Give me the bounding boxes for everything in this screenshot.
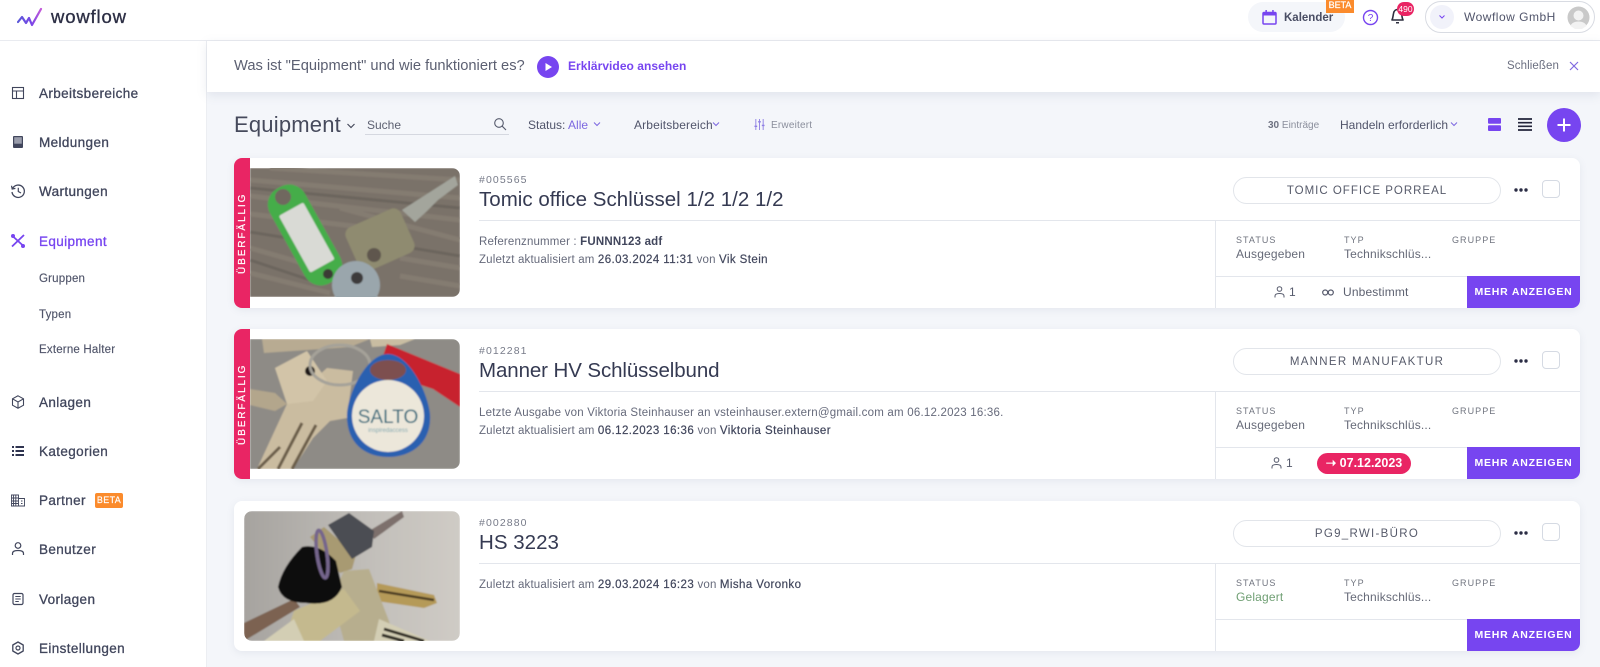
video link: Erklärvideo ansehen <box>568 59 686 73</box>
equipment id: #005565 <box>479 174 528 186</box>
page title: Equipment <box>234 112 341 137</box>
toolbar <box>234 108 1581 142</box>
photo: keys with SALTO fob: inspiredaccess <box>368 428 408 434</box>
reference number: Referenznummer : FUNNN123 adf <box>479 236 662 248</box>
equipment title: Tomic office Schlüssel 1/2 1/2 1/2 <box>479 188 784 211</box>
location pill: PG9_RWI-BÜRO <box>1315 528 1419 540</box>
nav item: Anlagen: Anlagen <box>39 395 91 410</box>
nav item: Partner with beta badge: BETA <box>97 495 121 505</box>
status value: Ausgegeben <box>1236 247 1305 261</box>
chevron button <box>1430 5 1454 29</box>
nav item: Anlagen <box>12 395 91 410</box>
equipment card: Tomic office <box>234 158 1580 308</box>
photo: keys with SALTO fob: SALTO <box>358 407 418 428</box>
group label: GRUPPE <box>1452 406 1496 416</box>
icon: search <box>494 118 506 130</box>
overdue date pill <box>1317 453 1411 474</box>
workspace filter: Arbeitsbereich <box>634 118 713 132</box>
nav item: Partner with beta badge: Partner <box>39 493 86 508</box>
sort dropdown: Handeln erforderlich <box>1340 118 1448 132</box>
type label: TYP <box>1344 578 1365 588</box>
sub nav: Externe Halter: Externe Halter <box>39 344 115 356</box>
sidebar navigation <box>0 41 207 667</box>
explainer banner <box>207 41 1600 92</box>
search field <box>365 114 509 135</box>
icon: more menu <box>1514 359 1528 363</box>
search placeholder: Suche <box>367 118 401 132</box>
select checkbox <box>1542 351 1560 369</box>
equipment id: #012281 <box>479 345 528 357</box>
nav item: Kategorien <box>12 444 108 460</box>
status value: Gelagert <box>1236 590 1283 604</box>
beta badge: BETA <box>1329 0 1351 10</box>
icon: notification bell <box>1391 8 1404 24</box>
status value: Ausgegeben <box>1236 418 1305 432</box>
last issue note: Letzte Ausgabe von Viktoria Steinhauser an vsteinhauser.extern@gmail.com am 06.12.2023 16:36. <box>479 407 1004 419</box>
icon: advanced filter sliders <box>754 119 765 130</box>
calendar label: Kalender <box>1284 12 1333 24</box>
sub nav: Typen: Typen <box>39 309 71 321</box>
more button <box>1467 276 1580 308</box>
equipment card: HS 3223 <box>234 501 1580 651</box>
equipment card: Manner HV <box>234 329 1580 479</box>
icon: help: ? <box>1368 13 1374 24</box>
location pill <box>1233 348 1501 375</box>
company name: Wowflow GmbH <box>1464 10 1556 24</box>
calendar button <box>1248 2 1345 32</box>
last updated: Zuletzt aktualisiert am 06.12.2023 16:36 von Viktoria Steinhauser <box>479 425 831 437</box>
type label: TYP <box>1344 235 1365 245</box>
status filter: Status: Alle <box>528 118 588 132</box>
group label: GRUPPE <box>1452 578 1496 588</box>
icon: calendar <box>1262 10 1277 25</box>
nav item: Wartungen: Wartungen <box>39 184 108 199</box>
due date value: Unbestimmt <box>1343 285 1409 299</box>
nav item: Vorlagen: Vorlagen <box>39 592 95 607</box>
type label: TYP <box>1344 406 1365 416</box>
equipment title: HS 3223 <box>479 531 559 554</box>
type value: Technikschlüs... <box>1344 247 1431 261</box>
nav item: Kategorien: Kategorien <box>39 444 108 459</box>
nav item: Einstellungen: Einstellungen <box>39 641 125 656</box>
more button <box>1467 619 1580 651</box>
equipment title: Manner HV Schlüsselbund <box>479 359 719 382</box>
icon: more menu <box>1514 531 1528 535</box>
type value: Technikschlüs... <box>1344 418 1431 432</box>
advanced filter label: Erweitert <box>771 120 812 131</box>
icon: card view <box>1488 118 1501 131</box>
last updated: Zuletzt aktualisiert am 26.03.2024 11:31 von Vik Stein <box>479 254 768 266</box>
nav item: Partner with beta badge <box>11 493 123 508</box>
sub nav: Gruppen: Gruppen <box>39 273 85 285</box>
last updated: Zuletzt aktualisiert am 29.03.2024 16:23 von Misha Voronko <box>479 579 801 591</box>
nav item: Benutzer: Benutzer <box>39 542 96 557</box>
holder count: 1 <box>1289 285 1296 299</box>
location pill <box>1233 520 1501 547</box>
nav item: Arbeitsbereiche: Arbeitsbereiche <box>39 86 139 101</box>
company selector <box>1425 1 1595 33</box>
more button: MEHR ANZEIGEN <box>1474 629 1573 641</box>
more button: MEHR ANZEIGEN <box>1474 286 1573 298</box>
more button: MEHR ANZEIGEN <box>1474 457 1573 469</box>
notification badge <box>1397 2 1414 16</box>
holder count: 1 <box>1286 456 1293 470</box>
holder count <box>1272 456 1293 470</box>
nav item: Benutzer <box>12 542 96 557</box>
status label: STATUS <box>1236 235 1276 245</box>
more button <box>1467 447 1580 479</box>
icon: wowflow logo <box>17 8 42 26</box>
select checkbox <box>1542 180 1560 198</box>
group label: GRUPPE <box>1452 235 1496 245</box>
icon: help <box>1362 10 1378 26</box>
nav item: Vorlagen <box>12 592 95 608</box>
overdue date pill: ➝ 07.12.2023 <box>1326 456 1402 470</box>
status label: STATUS <box>1236 578 1276 588</box>
overdue ribbon: ÜBERFÄLLIG <box>237 193 248 274</box>
beta badge <box>1326 0 1354 13</box>
status label: STATUS <box>1236 406 1276 416</box>
close label: Schließen <box>1507 60 1559 72</box>
overdue ribbon <box>234 158 250 308</box>
nav item: Wartungen <box>11 184 108 200</box>
add button <box>1547 108 1581 142</box>
location pill <box>1233 177 1501 204</box>
nav item: Meldungen: Meldungen <box>39 135 109 150</box>
top header bar <box>0 0 1600 41</box>
sort chevron <box>1450 122 1458 126</box>
notification badge: 490 <box>1398 4 1413 14</box>
type value: Technikschlüs... <box>1344 590 1431 604</box>
icon: infinity <box>1322 289 1334 296</box>
banner question: Was ist "Equipment" und wie funktioniert es? <box>234 58 525 74</box>
title chevron <box>347 124 355 128</box>
overdue ribbon: ÜBERFÄLLIG <box>237 364 248 445</box>
location pill: TOMIC OFFICE PORREAL <box>1287 185 1447 197</box>
photo: keys with SALTO fob <box>250 339 460 469</box>
nav item: Equipment (active) <box>11 234 107 250</box>
status chevron <box>594 122 600 126</box>
equipment id: #002880 <box>479 517 528 529</box>
entries count: 30 Einträge <box>1268 120 1319 131</box>
icon: close <box>1570 62 1578 70</box>
holder count <box>1274 285 1296 299</box>
icon: play button <box>537 56 559 78</box>
photo: key bunch with black fob <box>244 511 460 641</box>
icon: more menu <box>1514 188 1528 192</box>
overdue ribbon <box>234 329 250 479</box>
logo wordmark: wowflow <box>51 6 127 27</box>
avatar <box>1568 6 1590 29</box>
nav item: Equipment (active): Equipment <box>39 234 107 249</box>
location pill: MANNER MANUFAKTUR <box>1290 356 1444 368</box>
workspace chevron <box>712 122 720 126</box>
icon: list view <box>1518 118 1532 131</box>
select checkbox <box>1542 523 1560 541</box>
photo: keys with green tag <box>250 168 460 297</box>
